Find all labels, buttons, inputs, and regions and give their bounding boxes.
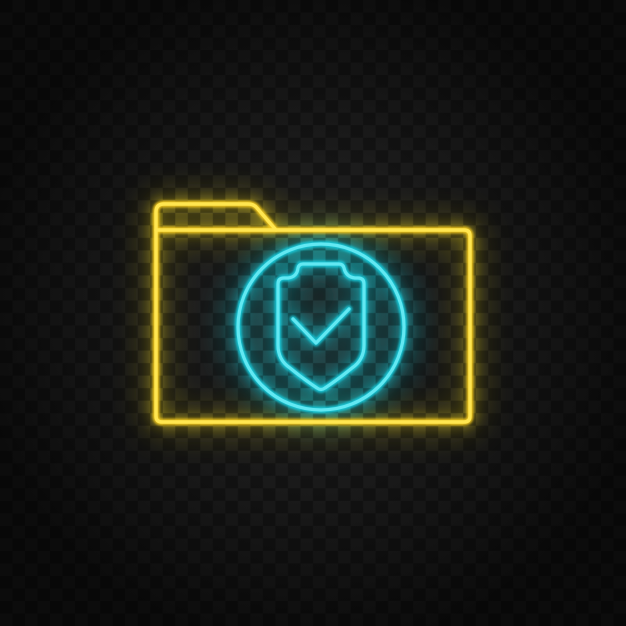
cyan glow — [238, 244, 404, 410]
shield badge outline — [238, 244, 404, 410]
folder outline — [156, 204, 470, 422]
yellow glow — [156, 204, 470, 422]
